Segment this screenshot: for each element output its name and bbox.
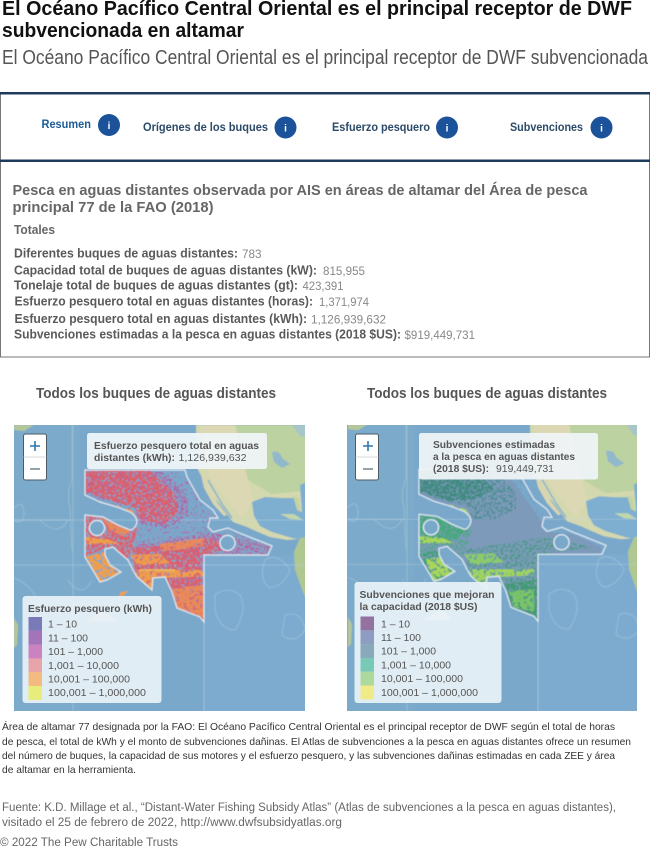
legend: la capacidad (2018 $US) (360, 601, 478, 613)
map: fishing effort (10, 420, 312, 715)
tab: Subvenciones (510, 116, 612, 138)
tab: Orígenes de los buques: Orígenes de los buques (143, 122, 268, 134)
small island patch (118, 590, 128, 596)
effort heat layer (85, 470, 275, 625)
totals list: Capacidad total de buques de aguas distantes (kW): (14, 264, 317, 278)
tab: Subvenciones: i (600, 124, 603, 134)
tab: Esfuerzo pesquero: i (446, 124, 449, 134)
copyright: © 2022 The Pew Charitable Trusts (0, 837, 178, 849)
totals list: $919,449,731 (404, 330, 475, 342)
totals list: Subvenciones estimadas a la pesca en aguas distantes (2018 $US): (14, 328, 401, 342)
info box: 919,449,731 (496, 463, 554, 475)
info box: a la pesca en aguas distantes (433, 451, 575, 463)
totals list: Esfuerzo pesquero total en aguas distantes (horas): (14, 294, 313, 308)
zoom control (356, 434, 378, 480)
caption (2, 720, 631, 776)
legend: 101 – 1,000 (381, 646, 436, 658)
title: subvencionada en altamar (2, 20, 244, 42)
caption: de pesca, el total de kWh y el monto de subvenciones dañinas. El Atlas de subvenciones a la pesca en aguas distantes ofrece un resumen (2, 736, 631, 748)
legend: 11 – 100 (48, 632, 88, 644)
tab: Resumen: Resumen (42, 119, 91, 131)
info box: (2018 $US): (433, 463, 489, 475)
info box: Subvenciones estimadas (433, 439, 555, 451)
totals list: 423,391 (302, 281, 344, 293)
tab: Resumen: i (108, 121, 111, 132)
info box (419, 433, 598, 480)
caption: Área de altamar 77 designada por la FAO: El Océano Pacífico Central Oriental es el principal receptor de DWF según el total de horas (2, 720, 615, 733)
legend: 1,001 – 10,000 (48, 660, 119, 672)
map: subsidies (344, 419, 646, 714)
zoom control (24, 434, 46, 480)
info box: 1,126,939,632 (178, 452, 247, 464)
totals list (14, 246, 475, 342)
panel heading: Pesca en aguas distantes observada por AIS en áreas de altamar del Área de pesca (12, 182, 588, 199)
tab: Esfuerzo pesquero: Esfuerzo pesquero (332, 122, 430, 134)
legend: 11 – 100 (381, 632, 421, 644)
legend: 1 – 10 (48, 618, 77, 630)
title (2, 0, 632, 42)
legend: 1,001 – 10,000 (381, 660, 451, 672)
legend: 10,001 – 100,000 (381, 673, 463, 685)
totals list: Diferentes buques de aguas distantes: (14, 246, 238, 260)
panel: summary box (0, 92, 650, 357)
legend: Esfuerzo pesquero (kWh) (28, 603, 152, 615)
info box: distantes (kWh): (94, 452, 175, 464)
right map heading: Todos los buques de aguas distantes (367, 386, 607, 402)
info box (87, 433, 267, 469)
legend: Subvenciones que mejoran (360, 589, 494, 601)
tab: Orígenes de los buques (143, 116, 296, 138)
totals list: 1,371,974 (319, 297, 370, 309)
legend: 100,001 – 1,000,000 (48, 687, 146, 699)
totals label: Totales (14, 223, 55, 237)
subsidy heat layer (419, 478, 602, 620)
source: visitado el 25 de febrero de 2022, http://www.dwfsubsidyatlas.org (2, 817, 342, 829)
totals list: Esfuerzo pesquero total en aguas distantes (kWh): (14, 312, 307, 326)
caption: de altamar en la herramienta. (2, 764, 136, 776)
panel heading: principal 77 de la FAO (2018) (12, 199, 214, 216)
tab: Orígenes de los buques: i (284, 124, 287, 134)
totals list: 1,126,939,632 (311, 314, 386, 326)
source (2, 802, 616, 829)
tab: Resumen (42, 114, 120, 136)
legend (22, 596, 162, 703)
info box: Esfuerzo pesquero total en aguas (94, 440, 259, 452)
totals list: 815,955 (323, 266, 365, 278)
legend (354, 582, 502, 703)
legend: 10,001 – 100,000 (48, 674, 130, 686)
left map heading: Todos los buques de aguas distantes (36, 386, 276, 402)
legend: 1 – 10 (381, 618, 410, 630)
totals list: 783 (242, 249, 262, 261)
tab: Esfuerzo pesquero (332, 116, 458, 138)
source: Fuente: K.D. Millage et al., “Distant-Water Fishing Subsidy Atlas” (Atlas de subvenciones a la pesca en aguas distantes), (2, 802, 616, 814)
tab: Subvenciones: Subvenciones (510, 122, 583, 134)
totals list: Tonelaje total de buques de aguas distantes (gt): (14, 278, 298, 292)
caption: del número de buques, la capacidad de sus motores y el esfuerzo pesquero, y las subvenciones dañinas estimadas en cada ZEE y área (2, 750, 615, 762)
panel heading (12, 182, 588, 216)
legend: 100,001 – 1,000,000 (381, 687, 478, 699)
legend: 101 – 1,000 (48, 646, 103, 658)
